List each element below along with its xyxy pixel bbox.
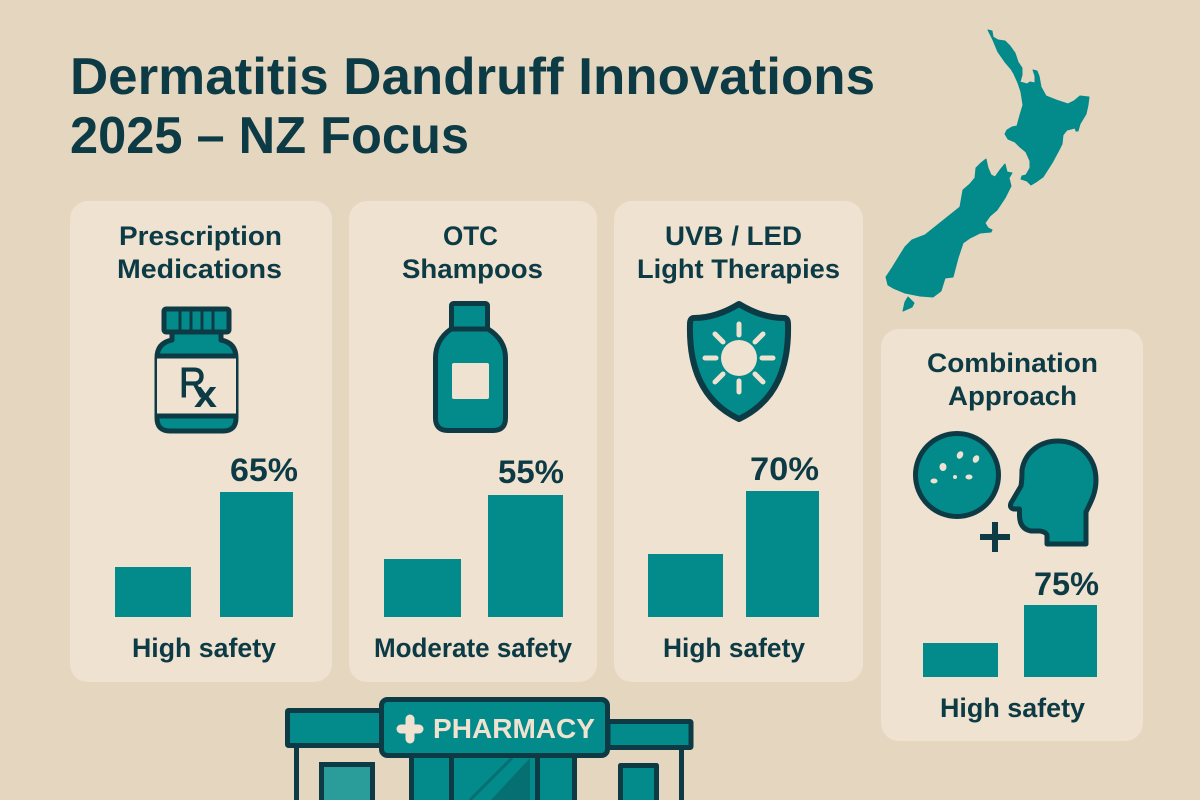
bar chart: combination: 75% — [1034, 566, 1099, 602]
icon: head profile — [1010, 441, 1096, 544]
icon: shampoo bottle — [436, 304, 506, 430]
icon: prescription bottle: x — [194, 374, 217, 416]
panel: prescription medications — [70, 201, 332, 682]
label: high safety: High safety — [940, 693, 1085, 723]
bar chart: UVB / LED: 70% — [750, 451, 819, 487]
label: high safety: High safety — [132, 633, 276, 663]
heading: UVB / LED light therapies: Light Therapies — [637, 254, 840, 284]
title: Dermatitis Dandruff Innovations — [70, 48, 875, 106]
title — [70, 48, 875, 165]
panel: OTC shampoos — [349, 201, 597, 682]
icon: prescription bottle: R — [179, 359, 206, 406]
icon: pharmacy storefront — [288, 700, 691, 800]
title: 2025 – NZ Focus — [70, 107, 469, 165]
heading: combination approach — [927, 348, 1098, 411]
panel: combination approach — [881, 329, 1143, 741]
heading: OTC shampoos — [402, 221, 543, 284]
bar chart: combination — [923, 566, 1099, 677]
heading: combination approach: Combination — [927, 348, 1098, 378]
bar chart: OTC shampoos — [384, 454, 564, 617]
heading: OTC shampoos: OTC — [443, 221, 498, 251]
bar chart: prescription: 65% — [230, 452, 298, 488]
map: New Zealand — [886, 30, 1089, 311]
bar chart: OTC shampoos: 55% — [498, 454, 564, 490]
icon: scalp circle with flakes — [916, 434, 998, 516]
heading: prescription medications: Medications — [117, 254, 282, 284]
heading: prescription medications — [117, 221, 282, 284]
heading: UVB / LED light therapies — [637, 221, 840, 284]
label: high safety: High safety — [663, 633, 805, 663]
icon: pharmacy storefront: PHARMACY — [433, 713, 595, 744]
bar chart: UVB / LED — [648, 451, 819, 617]
bar chart: prescription — [115, 452, 298, 617]
icon: plus — [980, 522, 1010, 552]
icon: shield with sun — [690, 304, 788, 419]
panel: UVB / LED light therapies — [614, 201, 863, 682]
label: moderate safety: Moderate safety — [374, 633, 572, 663]
icon: prescription bottle — [157, 309, 236, 431]
heading: combination approach: Approach — [948, 381, 1077, 411]
heading: prescription medications: Prescription — [119, 221, 282, 251]
heading: UVB / LED light therapies: UVB / LED — [665, 221, 802, 251]
heading: OTC shampoos: Shampoos — [402, 254, 543, 284]
